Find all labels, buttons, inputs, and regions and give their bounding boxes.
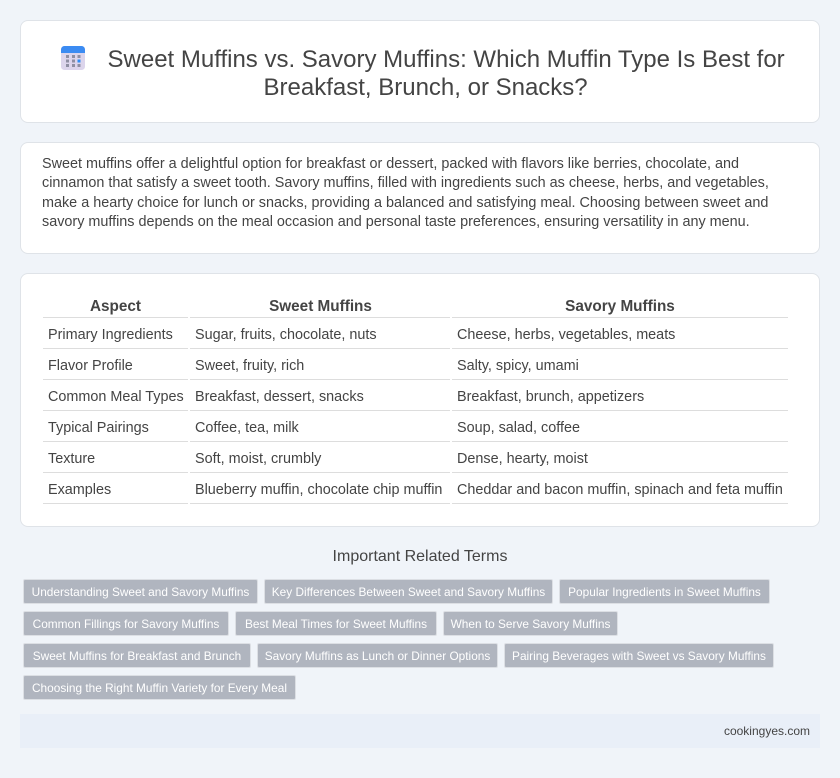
panel: comparison table [20,273,820,527]
title: Sweet Muffins vs. Savory Muffins: Which Muffin Type Is Best for [108,46,785,72]
row: typical pairings [48,420,580,436]
intro text: savory muffins depends on the meal occasion and personal taste preferences, ensuring versatility in any menu. [42,214,750,230]
tags: related terms [23,579,774,700]
row: flavor profile: Salty, spicy, umami [457,358,579,374]
row: common meal types: Breakfast, brunch, appetizers [457,389,644,405]
row: texture: Texture [48,451,95,467]
tags: related terms: Savory Muffins as Lunch or Dinner Options [265,649,490,663]
intro text: cinnamon that satisfy a sweet tooth. Savory muffins, filled with ingredients such as cheese, herbs, and vegetables, [42,175,769,191]
panel: header [20,20,820,123]
row: examples: Examples [48,482,111,498]
row: flavor profile: Flavor Profile [48,358,133,374]
row: primary ingredients: Cheese, herbs, vegetables, meats [457,327,675,343]
table header: sweet muffins: Sweet Muffins [269,298,372,315]
row: typical pairings: Typical Pairings [48,420,149,436]
row: primary ingredients [48,327,675,343]
row: common meal types [48,389,644,405]
footer [20,714,820,748]
title [108,46,785,101]
tags: related terms: When to Serve Savory Muffins [451,617,610,631]
tags: related terms: Choosing the Right Muffin Variety for Every Meal [32,681,287,695]
tags: related terms: Pairing Beverages with Sweet vs Savory Muffins [512,649,766,663]
panel: introduction [20,142,820,254]
table header: aspect: Aspect [90,298,141,315]
row: examples [48,482,783,498]
row: texture: Dense, hearty, moist [457,451,588,467]
row: flavor profile [48,358,579,374]
row: typical pairings: Soup, salad, coffee [457,420,580,436]
row: primary ingredients: Sugar, fruits, chocolate, nuts [195,327,377,343]
intro text: make a hearty choice for lunch or snacks, providing a balanced and satisfying meal. Choosing between sweet and [42,195,768,211]
row: common meal types: Common Meal Types [48,389,184,405]
intro text: Sweet muffins offer a delightful option for breakfast or dessert, packed with flavors like berries, chocolate, and [42,156,739,172]
tags: related terms: Best Meal Times for Sweet Muffins [245,617,427,631]
table header: savory muffins: Savory Muffins [565,298,675,315]
intro text [42,156,769,230]
row: texture: Soft, moist, crumbly [195,451,321,467]
tags: related terms: Understanding Sweet and Savory Muffins [32,585,249,599]
row: flavor profile: Sweet, fruity, rich [195,358,304,374]
row: common meal types: Breakfast, dessert, snacks [195,389,364,405]
title: Breakfast, Brunch, or Snacks? [264,74,588,101]
source credit: cookingyes.com [724,724,810,738]
row: examples: Blueberry muffin, chocolate chip muffin [195,482,442,498]
icon: calendar [61,46,85,70]
row: texture [48,451,588,467]
tags: related terms: Key Differences Between Sweet and Savory Muffins [272,585,545,599]
tags: related terms: Sweet Muffins for Breakfast and Brunch [33,649,241,663]
row: typical pairings: Coffee, tea, milk [195,420,299,436]
row: primary ingredients: Primary Ingredients [48,327,173,343]
heading: related terms: Important Related Terms [333,548,507,565]
row: examples: Cheddar and bacon muffin, spinach and feta muffin [457,482,783,498]
tags: related terms: Common Fillings for Savory Muffins [33,617,219,631]
tags: related terms: Popular Ingredients in Sweet Muffins [568,585,761,599]
